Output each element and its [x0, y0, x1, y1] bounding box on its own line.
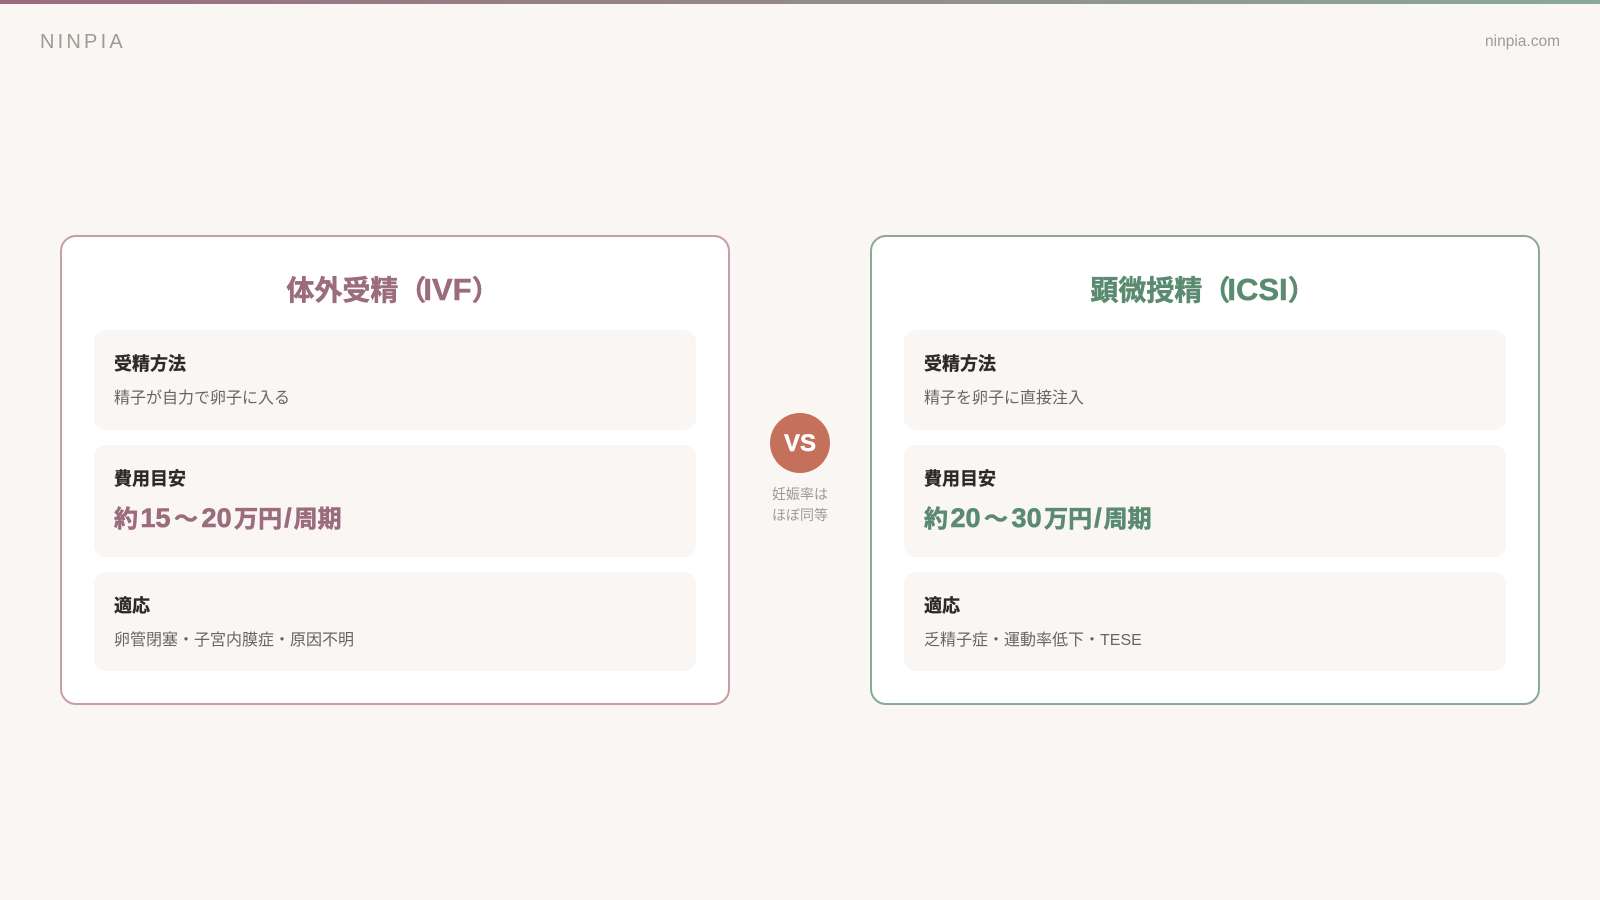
text: cost: 約20〜30万円/周期 [924, 503, 1152, 533]
note: pregnancy rate: 妊娠率は [772, 486, 828, 502]
label: 費用目安 [924, 469, 996, 489]
text: indication: 乏精子症・運動率低下・TESE [924, 632, 1142, 649]
panel: IVF [60, 235, 730, 705]
text: cost: 約15〜20万円/周期 [114, 503, 342, 533]
label: 費用目安 [114, 469, 186, 489]
top gradient bar [0, 0, 1600, 4]
label: 適応 [114, 596, 150, 616]
text: method: 精子が自力で卵子に入る [114, 390, 290, 407]
heading: ICSI: 顕微授精（ICSI） [1090, 272, 1316, 307]
text: indication: 卵管閉塞・子宮内膜症・原因不明 [114, 632, 354, 649]
label: 受精方法 [924, 354, 996, 374]
row: method [94, 330, 696, 430]
panel: ICSI [870, 235, 1540, 705]
row: cost [904, 445, 1506, 557]
site url: ninpia.com [1485, 33, 1560, 50]
note: pregnancy rate [772, 486, 828, 523]
label: 適応 [924, 596, 960, 616]
VS badge [770, 413, 830, 473]
VS badge: VS [784, 430, 816, 457]
note: pregnancy rate: ほぼ同等 [772, 507, 828, 523]
text: method: 精子を卵子に直接注入 [924, 390, 1084, 407]
row: cost [94, 445, 696, 557]
row: indication [904, 572, 1506, 671]
row: method [904, 330, 1506, 430]
heading: IVF: 体外受精（IVF） [286, 272, 500, 307]
row: indication [94, 572, 696, 671]
label: 受精方法 [114, 354, 186, 374]
brand logo: NINPIA [40, 31, 126, 53]
